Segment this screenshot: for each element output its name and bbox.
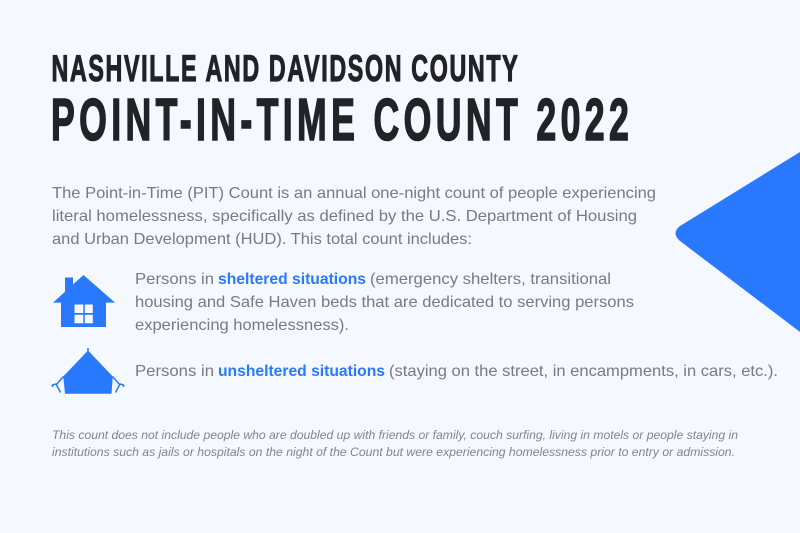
intro paragraph [52, 185, 656, 248]
decorative blue triangle [676, 152, 800, 332]
intro paragraph: and Urban Development (HUD). This total count includes: [52, 231, 472, 248]
unsheltered text: Persons in [135, 363, 214, 380]
sheltered text: Persons in [135, 271, 214, 288]
footnote [52, 428, 738, 459]
intro paragraph: The Point-in-Time (PIT) Count is an annual one-night count of people experiencing [52, 185, 656, 202]
sheltered text: housing and Safe Haven beds that are dedicated to serving persons [135, 294, 634, 311]
unsheltered text: unsheltered situations [218, 363, 385, 380]
icon: house [53, 275, 115, 327]
title: POINT-IN-TIME COUNT 2022 [51, 88, 629, 153]
sheltered text: (emergency shelters, transitional [370, 271, 611, 288]
unsheltered text: (staying on the street, in encampments, in cars, etc.). [389, 363, 778, 380]
footnote: institutions such as jails or hospitals on the night of the Count but were experiencing homelessness prior to entry or admission. [52, 445, 735, 459]
footnote: This count does not include people who are doubled up with friends or family, couch surfing, living in motels or people staying in [52, 428, 738, 442]
intro paragraph: literal homelessness, specifically as defined by the U.S. Department of Housing [52, 208, 637, 225]
title: NASHVILLE AND DAVIDSON COUNTY [52, 47, 518, 89]
sheltered text: sheltered situations [218, 271, 366, 288]
title [51, 47, 629, 153]
sheltered text: experiencing homelessness). [135, 317, 349, 334]
icon: tent [52, 348, 124, 394]
unsheltered text [135, 363, 778, 380]
sheltered text [135, 271, 634, 334]
